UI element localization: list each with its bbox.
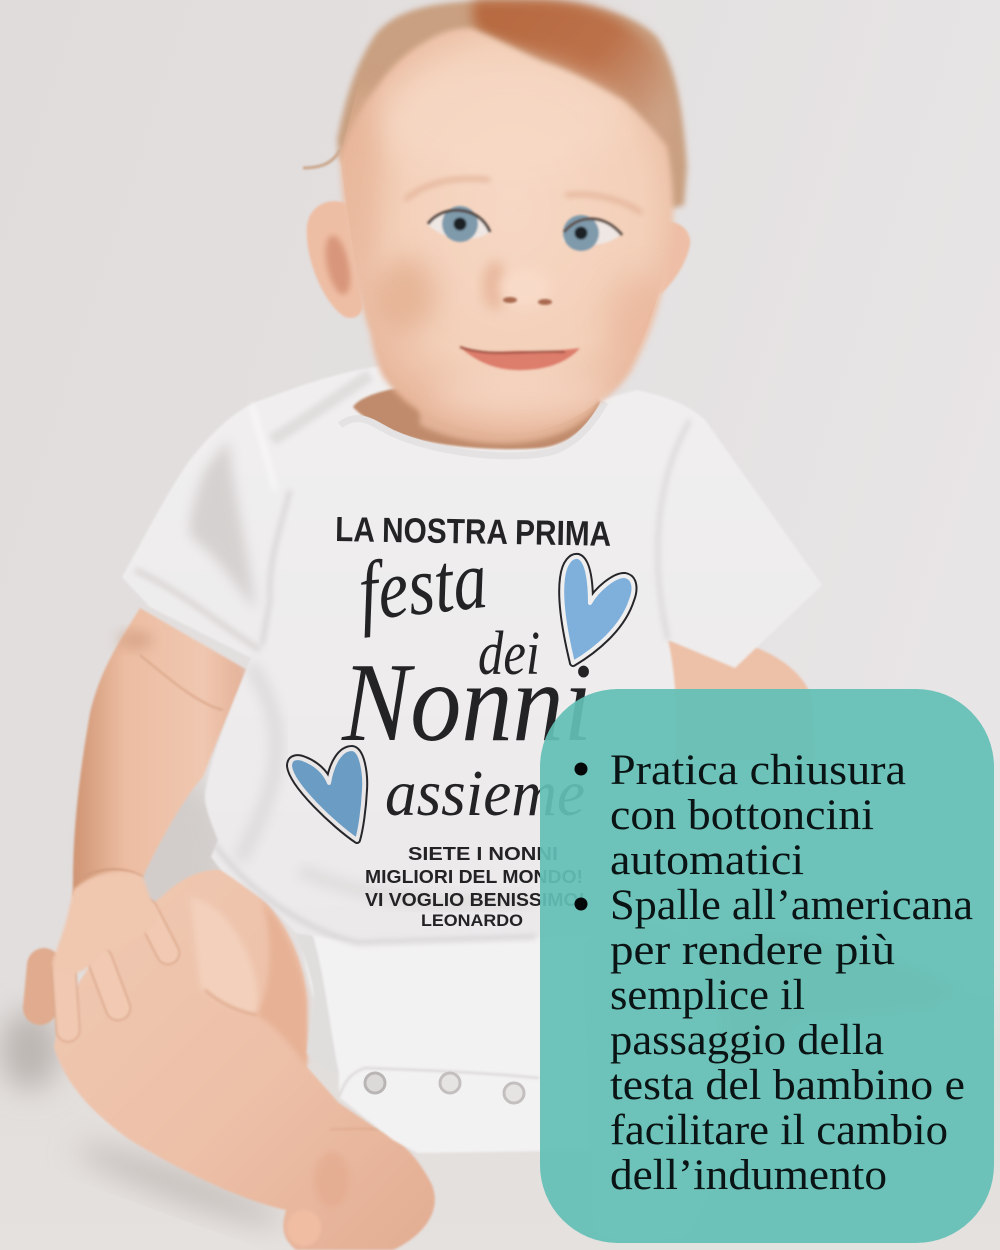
snap button right [504,1083,524,1103]
bullet 2 line 4: passaggio della [610,1017,884,1064]
bullet 1 line 3: automatici [610,837,804,884]
eyebrow: left [405,179,490,200]
eye: left [428,206,490,242]
facial shading [335,60,675,417]
ear: right [658,222,690,296]
bullet 2 line 3: semplice il [610,972,805,1019]
print: assieme: assieme [385,757,585,830]
baby: far arm [650,640,815,760]
sleeve fold shading [135,375,690,943]
bullet 2 line 7: dell’indumento [610,1152,887,1199]
baby: second hand and leg seen through the panel [590,927,960,1230]
panel background [540,689,994,1243]
eyebrow: right [565,194,642,213]
baby: onesie lower part [296,900,690,1153]
bullet 2 line 6: facilitare il cambio [610,1107,948,1154]
neck [353,380,600,449]
ear: left [307,201,363,318]
bullet 2 line 5: testa del bambino e [610,1062,965,1109]
bullet 2 [574,898,588,910]
print: dei: dei [478,620,540,688]
print: heading: LA NOSTRA PRIMA [335,510,611,554]
nose [483,261,552,309]
print: festa: festa [354,533,491,639]
print: Nonni: Nonni [341,641,592,765]
print: message line 1: SIETE I NONNI [408,844,558,864]
eye: right [562,215,622,251]
shirt print [335,510,611,930]
snap button left [365,1073,385,1093]
print: message line 3: VI VOGLIO BENISSIMO! [365,890,585,910]
hand: finger two [100,960,118,1008]
mouth [460,347,580,370]
hand: back of hand [52,872,158,974]
hand: little finger [40,965,44,1008]
baby: head and face [303,0,690,456]
hand: finger one [64,970,68,1030]
collar rib [340,402,605,456]
hair: back [337,0,687,208]
bullet 1 [574,762,588,776]
snap button middle [440,1073,460,1093]
bullet 2 line 2: per rendere più [610,927,895,974]
print: message line 4: LEONARDO [421,911,523,930]
bullet 2 line 1: Spalle all’americana [610,882,973,929]
icon: blue heart right [562,557,633,663]
hair strand left [303,150,340,168]
bullet 1 line 1: Pratica chiusura [610,747,906,794]
feature panel [540,689,994,1243]
hand: finger three [146,910,168,953]
baby: near leg and foot [54,870,435,1250]
print: message line 2: MIGLIORI DEL MONDO! [365,867,583,887]
face [340,28,673,433]
baby: hand on knee [40,872,168,1030]
baby: near arm [73,608,247,897]
bullet 1 line 2: con bottoncini [610,792,874,839]
hair: red top [472,0,673,160]
baby: onesie top with sleeves [122,366,822,943]
neck shadow right [420,400,600,443]
bullet list [574,747,973,1199]
icon: blue heart left [290,749,364,840]
